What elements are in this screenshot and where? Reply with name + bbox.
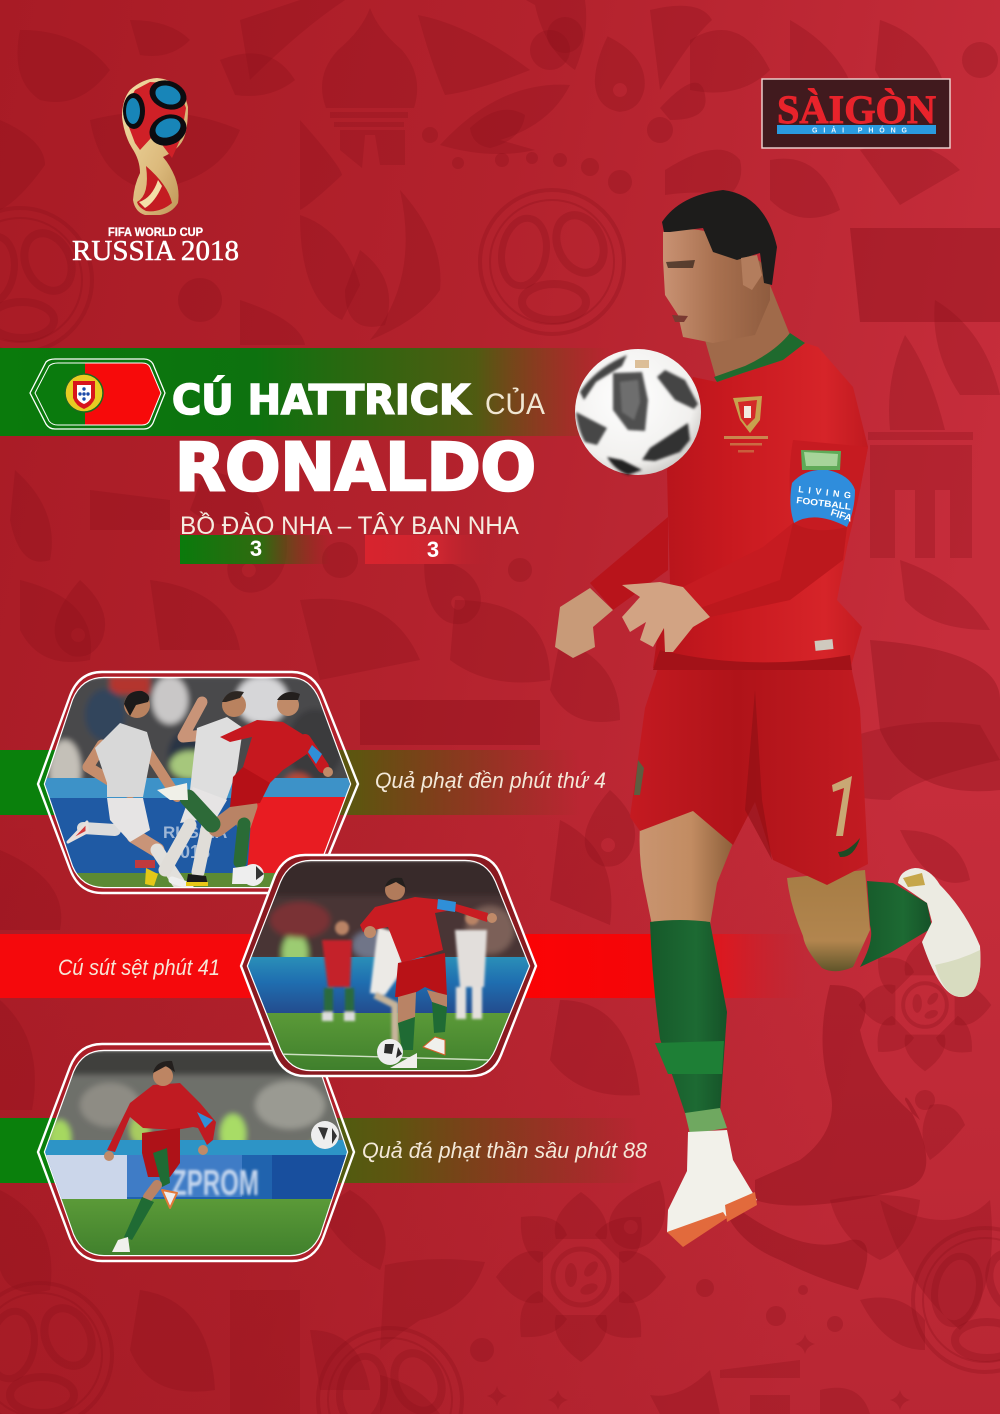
score Spain: 3	[427, 537, 439, 562]
standing leg	[640, 808, 757, 1247]
near arm	[683, 440, 868, 617]
crowd	[46, 1051, 346, 1148]
photo 3: free kick	[38, 1044, 354, 1261]
far hand	[555, 588, 613, 658]
logo: FIFA World Cup	[72, 75, 239, 267]
player: Nacho	[165, 691, 246, 886]
photo strip 2 right	[525, 934, 805, 998]
player: Busquets	[68, 691, 190, 886]
score Portugal: 3	[250, 536, 262, 561]
photo strip 2 left	[0, 934, 260, 998]
captain armband: FOOTBALL	[796, 495, 852, 512]
captain armband: FIFA	[829, 507, 853, 525]
photo 1: penalty	[38, 672, 360, 893]
neck and head	[662, 190, 790, 382]
icon: trophy	[122, 75, 191, 215]
logo: Sài Gòn Giải Phóng: GIẢI PHÓNG	[812, 126, 908, 134]
far arm	[590, 517, 668, 610]
captain armband	[790, 450, 855, 527]
caption 1: Quả phạt đền phút thứ 4	[375, 768, 606, 793]
title line: CỦA	[485, 387, 545, 421]
photo 2: low shot	[241, 855, 536, 1076]
logo: FIFA World Cup: RUSSIA 2018	[72, 235, 239, 267]
photo 1: penalty: 2018	[170, 842, 210, 862]
logo: Sài Gòn Giải Phóng	[762, 79, 950, 148]
blurred background players	[322, 911, 487, 1050]
player: free kick	[104, 1061, 216, 1252]
captain armband: LIVING	[798, 484, 852, 500]
photo strip 3	[0, 1118, 640, 1183]
near hand	[622, 582, 710, 652]
flag badge: Portugal	[30, 359, 165, 429]
photo 3: free kick: ZPROM	[172, 1162, 259, 1203]
icon: coat of arms	[65, 374, 103, 412]
crowd	[249, 861, 528, 963]
score bar green	[180, 535, 330, 564]
player: Ronaldo kicking	[157, 692, 333, 884]
ball	[246, 864, 264, 886]
match teams: BỒ ĐÀO NHA – TÂY BAN NHA	[180, 510, 519, 540]
logo text: FIFA WORLD CUP	[108, 225, 203, 239]
green title banner	[0, 348, 610, 436]
player: Ronaldo	[555, 190, 980, 1247]
photo strip 1	[0, 750, 580, 815]
heading: RONALDO: RONALDO	[175, 429, 536, 506]
photo 1: penalty: RUSSIA	[163, 823, 227, 842]
jersey	[653, 333, 868, 670]
title line: CÚ HATTRICK	[172, 376, 472, 424]
crowd	[45, 678, 350, 790]
score bar red	[365, 535, 490, 564]
trailing leg	[787, 868, 980, 997]
logo: Sài Gòn Giải Phóng: SÀIGÒN	[777, 87, 936, 132]
crest	[724, 396, 768, 452]
player: low shot	[360, 878, 497, 1068]
ball	[377, 1039, 403, 1065]
ball	[311, 1121, 339, 1149]
caption 2: Cú sút sệt phút 41	[58, 955, 220, 980]
shorts	[630, 656, 868, 885]
caption 3: Quả đá phạt thần sầu phút 88	[362, 1138, 648, 1163]
football	[575, 349, 701, 475]
